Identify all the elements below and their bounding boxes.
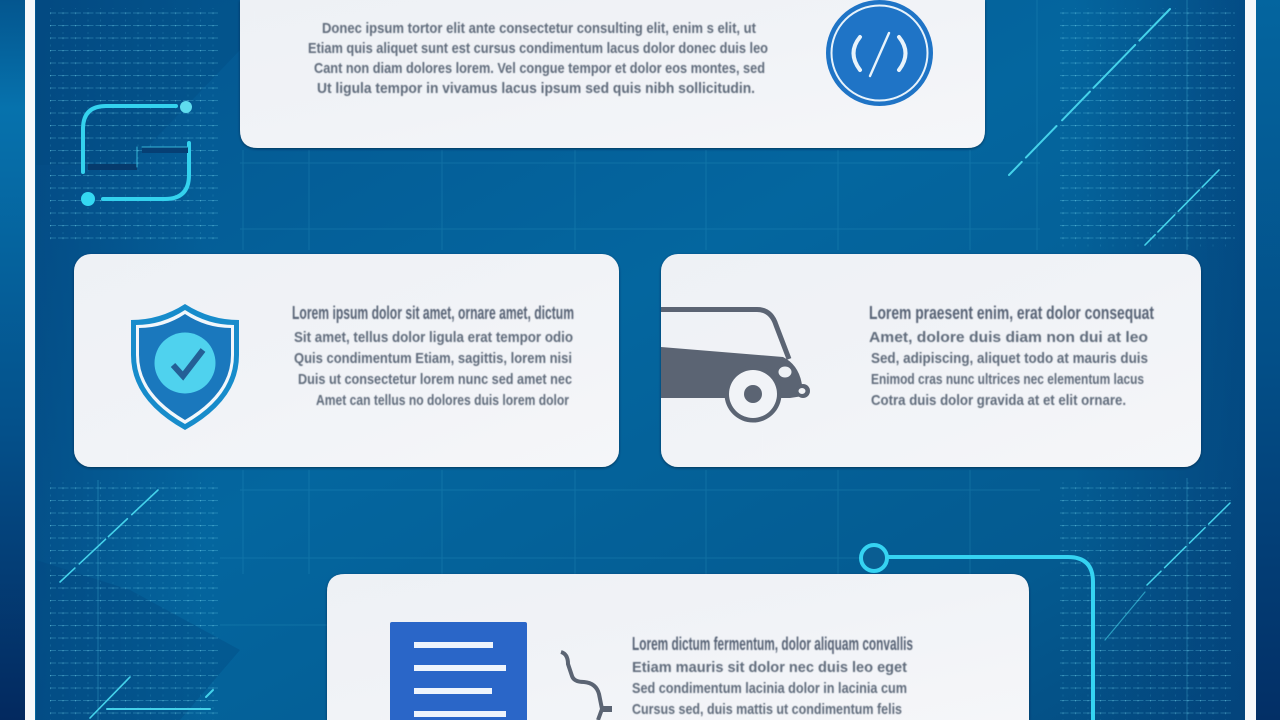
text block: document card: Cursus sed, duis mattis ut condimentum felis [632,701,902,718]
panel: document card [327,574,1029,720]
white frame left [25,0,35,720]
panel: vehicle card [661,254,1201,467]
right edge strip [1256,0,1280,720]
text block: document card [632,634,913,718]
circuit connector: bottom right [861,545,1093,720]
left edge strip [0,0,25,720]
text block: security card: Amet can tellus no dolores duis lorem dolor [316,392,569,409]
text block: security card: Duis ut consectetur lorem nunc sed amet nec [298,371,572,388]
text block: vehicle card [869,303,1154,409]
text block: document card: Etiam mauris sit dolor nec duis leo eget [632,659,907,676]
panel: top card [240,0,985,148]
text block: top card: Cant non diam dolores lorem. Vel congue tempor et dolor eos montes, sed [314,60,765,77]
text block: security card [292,303,574,409]
circuit connector: top left [81,101,192,206]
text block: vehicle card: Sed, adipiscing, aliquet todo at mauris duis [871,350,1148,367]
text block: security card: Sit amet, tellus dolor ligula erat tempor odio [294,329,573,346]
text block: vehicle card: Cotra duis dolor gravida at et elit ornare. [871,392,1126,409]
text block: vehicle card: Enimod cras nunc ultrices nec elementum lacus [871,371,1144,388]
icon: bracket connector [561,652,612,720]
icon: code symbol [826,0,933,106]
text block: security card: Quis condimentum Etiam, sagittis, lorem nisi [294,350,572,367]
icon: shield with check [131,304,239,430]
text block: security card: Lorem ipsum dolor sit amet, ornare amet, dictum [292,303,574,323]
icon: document [390,622,527,720]
text block: top card: Donec ipsum tortor elit ante consectetur consulting elit, enim s elit, ut [322,20,756,37]
text block: top card: Etiam quis aliquet sunt est cursus condimentum lacus dolor donec duis leo [308,40,768,57]
text block: vehicle card: Amet, dolore duis diam non dui at leo [869,329,1148,346]
text block: vehicle card: Lorem praesent enim, erat dolor consequat [869,303,1154,323]
icon: car [661,310,810,422]
text block: top card: Ut ligula tempor in vivamus lacus ipsum sed quis nibh sollicitudin. [317,80,755,97]
text block: document card: Lorem dictum fermentum, dolor aliquam convallis [632,634,913,654]
text block: document card: Sed condimentum lacinia dolor in lacinia cum [632,680,907,697]
panel: security card [74,254,619,467]
white frame right [1245,0,1256,720]
text block: top card [308,20,768,97]
